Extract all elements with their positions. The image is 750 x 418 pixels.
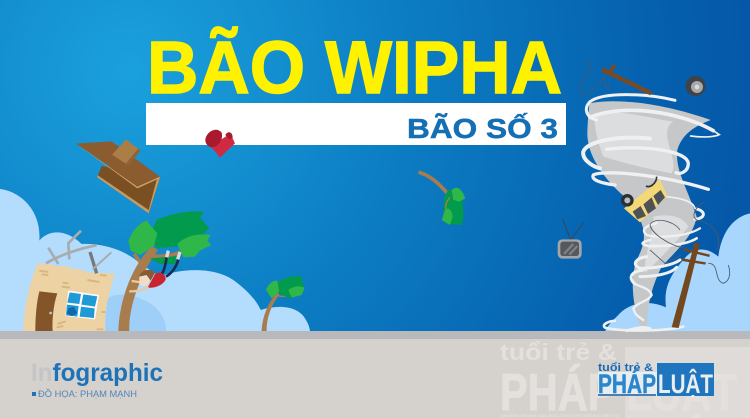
right clouds [605,213,750,332]
white swirls [583,95,719,331]
watermark tagline: tuổi trẻ & [500,339,617,365]
foliage [150,211,209,264]
door [35,291,57,331]
window [65,291,99,319]
icon: flying roof [76,139,160,213]
branch [134,252,182,262]
tornado [558,60,730,331]
footer panel [0,339,750,418]
wall [23,263,115,331]
subtitle bar [146,103,566,145]
icon: overturned bus [621,177,667,222]
small tree [262,276,305,331]
roof debris [46,231,97,264]
icon: flying power pole [601,64,652,95]
bricks [39,271,107,329]
footer heading: Infographic [31,359,163,387]
house [23,231,115,331]
dangling wires [580,60,730,283]
logo tagline: tuổi trẻ & [598,362,653,374]
logo block [657,363,714,396]
icon: flying tire [686,76,706,96]
logo small line [598,394,656,396]
icon: flying branch [420,173,465,225]
left clouds [0,189,310,332]
watermark logo [500,339,737,418]
big bent tree [118,211,211,331]
funnel [587,101,711,327]
title: BÃO WIPHA [147,26,562,109]
ground strip [0,331,750,339]
logo word right: LUẬT [658,368,713,399]
icon: leaning power pole [672,243,710,328]
subtitle: BÃO SỐ 3 [407,112,558,144]
icon: flying TV [558,219,584,259]
watermark small line: CHUYÊN TRANG CỦA BÁO TUỔI TRẺ THỦ ĐÔ ĐIỆN TỬ [500,413,621,418]
icon: flying red armchair [205,130,235,158]
hanging person [129,251,180,291]
sky background [0,0,750,332]
credit bullet [32,392,36,396]
credit: ĐỒ HỌA: PHẠM MẠNH [38,388,137,400]
logo: Pháp Luật [598,362,714,399]
trunk [118,246,158,331]
logo word left: PHÁP [598,368,656,399]
logo panel [625,347,750,418]
